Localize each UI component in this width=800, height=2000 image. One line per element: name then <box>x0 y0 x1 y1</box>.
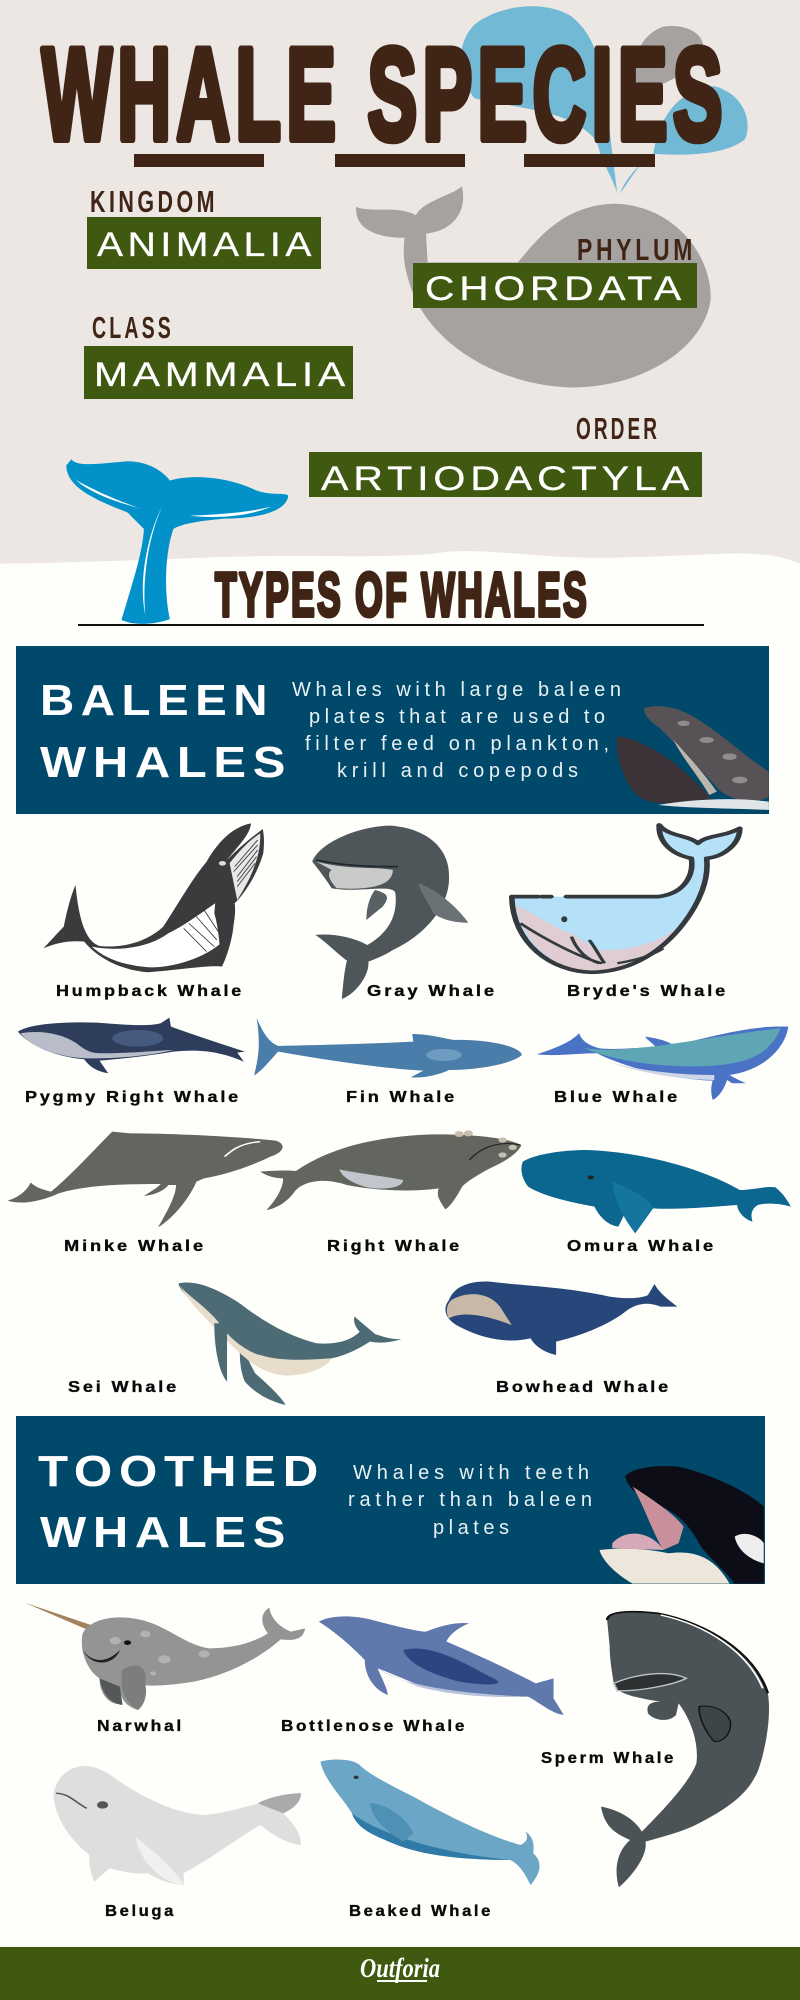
heading: toothed whales <box>38 1447 325 1557</box>
box: artiodactyla: ARTIODACTYLA <box>321 460 694 498</box>
whale: gray <box>312 826 468 999</box>
labels: toothed row two: Beluga <box>105 1903 176 1920</box>
whale: bryde's <box>512 825 740 972</box>
heading: toothed whales: TOOTHED <box>38 1447 325 1496</box>
whale: omura <box>521 1150 791 1233</box>
text: toothed description <box>348 1462 592 1539</box>
baleen whale illustrations continued <box>8 1130 791 1405</box>
box: chordata: CHORDATA <box>425 270 686 308</box>
labels: baleen row two: Fin Whale <box>346 1089 457 1106</box>
whale: blue <box>537 1026 788 1100</box>
labels: baleen row one: Humpback Whale <box>56 983 244 1000</box>
labels: baleen row three: Right Whale <box>327 1238 462 1255</box>
heading: baleen whales: BALEEN <box>40 676 274 725</box>
heading: toothed whales: WHALES <box>40 1508 292 1557</box>
whale: fin <box>254 1018 522 1077</box>
box: mammalia: MAMMALIA <box>94 356 350 394</box>
labels: toothed row one <box>97 1718 467 1735</box>
whale: minke <box>8 1132 283 1227</box>
box: artiodactyla <box>309 452 702 498</box>
title underlines <box>134 154 655 167</box>
text: baleen description: krill and copepods <box>337 760 578 782</box>
text: baleen description: Whales with large baleen <box>292 679 621 701</box>
icon: grey whale with blue spout <box>356 6 748 387</box>
label: phylum: PHYLUM <box>577 232 696 267</box>
labels: toothed row two: Beaked Whale <box>349 1903 493 1920</box>
label: kingdom: KINGDOM <box>90 184 218 219</box>
text: baleen description <box>292 679 621 782</box>
labels: baleen row two <box>25 1089 680 1106</box>
heading: baleen whales <box>40 676 292 787</box>
labels: baleen row two: Pygmy Right Whale <box>25 1089 241 1106</box>
box: mammalia <box>84 346 353 399</box>
label: sperm whale: Sperm Whale <box>541 1750 676 1767</box>
photo: baleen whale jaws <box>617 706 769 810</box>
labels: baleen row one: Bryde's Whale <box>567 983 728 1000</box>
whale: bowhead <box>445 1282 678 1355</box>
labels: baleen row three: Minke Whale <box>64 1238 206 1255</box>
labels: baleen row four: Sei Whale <box>68 1379 179 1396</box>
panel: toothed whales banner <box>16 1416 765 1584</box>
labels: baleen row two: Blue Whale <box>554 1089 680 1106</box>
footer <box>0 1947 800 2000</box>
box: animalia <box>87 217 321 269</box>
labels: baleen row one <box>56 983 728 1000</box>
whale: pygmy right <box>18 1018 245 1073</box>
text: toothed description: Whales with teeth <box>353 1462 589 1484</box>
labels: toothed row one: Narwhal <box>97 1718 184 1735</box>
whale: sperm <box>601 1612 769 1887</box>
photo: orca open mouth <box>599 1466 764 1584</box>
icon: blue whale tail <box>66 459 288 624</box>
box: chordata <box>413 263 697 308</box>
whale: humpback <box>43 823 264 972</box>
whale: bottlenose <box>319 1616 564 1715</box>
box: animalia: ANIMALIA <box>97 226 316 264</box>
heading: baleen whales: WHALES <box>40 738 292 787</box>
whale: sei <box>179 1282 402 1405</box>
logo: outforia: Outforia <box>360 1953 440 1983</box>
label: order: ORDER <box>576 411 660 446</box>
panel: baleen whales banner <box>16 646 769 814</box>
label: class: CLASS <box>92 310 174 345</box>
whale: narwhal <box>24 1603 305 1710</box>
labels: toothed row one: Bottlenose Whale <box>281 1718 467 1735</box>
labels: baleen row four: Bowhead Whale <box>496 1379 671 1396</box>
text: baleen description: filter feed on plankton, <box>305 733 609 755</box>
whale: right <box>260 1130 521 1210</box>
text: toothed description: plates <box>433 1517 509 1539</box>
text: baleen description: plates that are used to <box>309 706 605 728</box>
panel: taxonomy header background <box>0 0 800 564</box>
whale: beaked <box>320 1759 540 1885</box>
whale: beluga <box>54 1766 301 1885</box>
text: toothed description: rather than baleen <box>348 1489 592 1511</box>
labels: baleen row one: Gray Whale <box>367 983 497 1000</box>
labels: baleen row three: Omura Whale <box>567 1238 716 1255</box>
labels: baleen row three <box>64 1238 716 1255</box>
labels: toothed row two <box>105 1903 493 1920</box>
baleen whale illustrations <box>18 823 788 1100</box>
labels: baleen row four <box>68 1379 671 1396</box>
toothed whale illustrations <box>24 1603 769 1887</box>
